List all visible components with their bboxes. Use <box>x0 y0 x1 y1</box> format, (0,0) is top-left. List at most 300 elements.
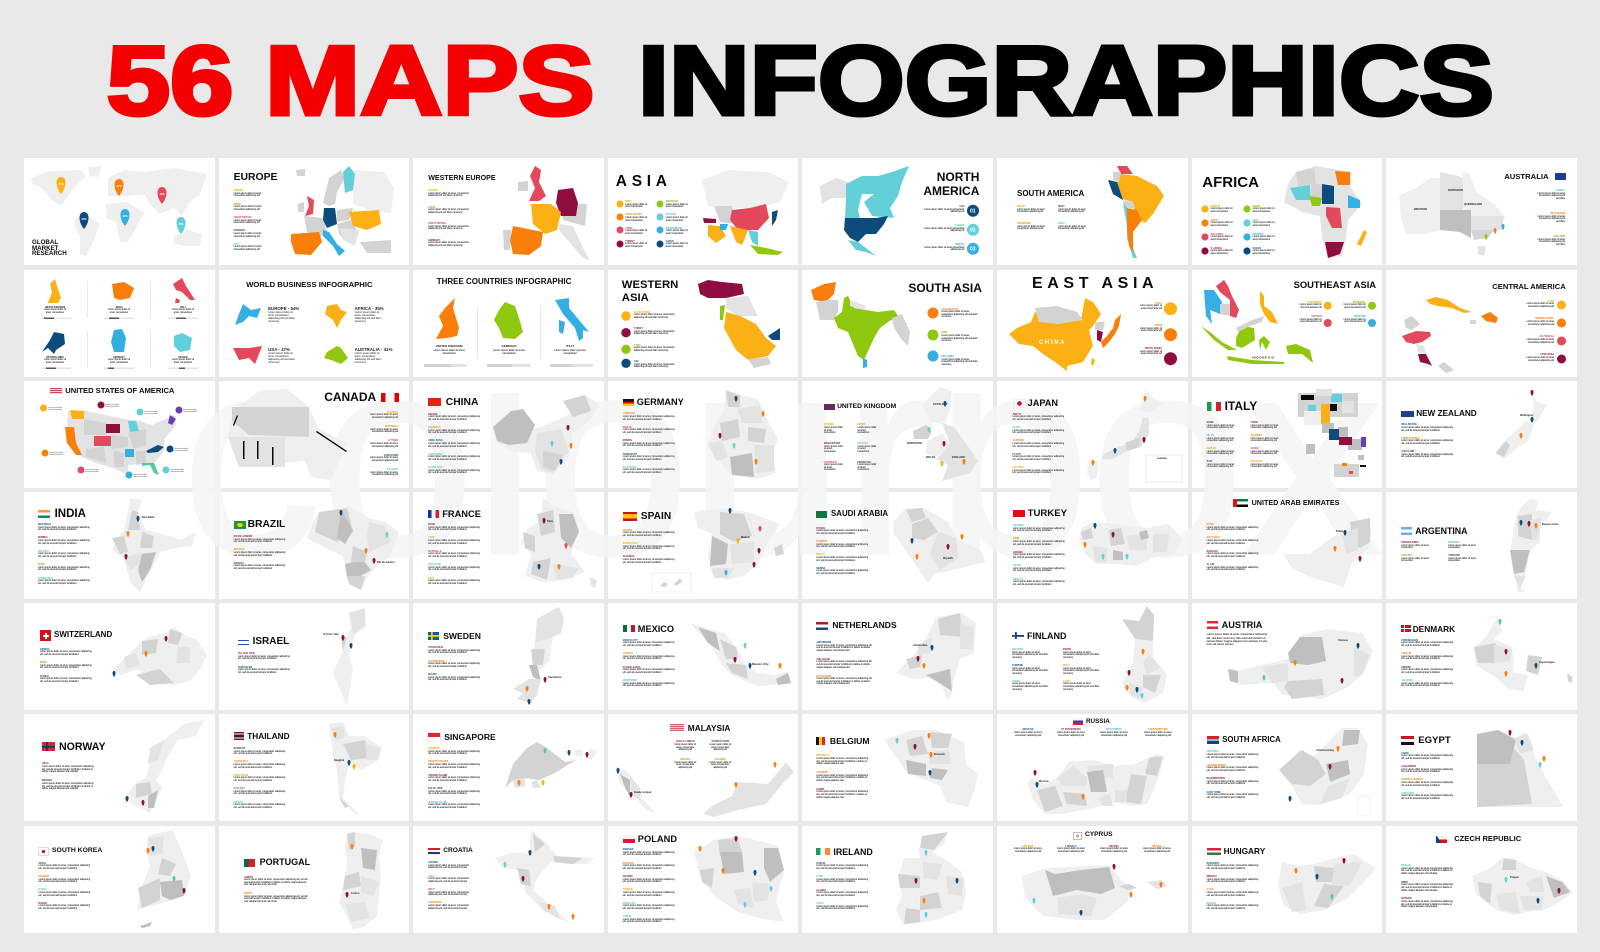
caption row 2: Germany: Lorem ipsum dolor sit amet, consectetur <box>108 359 130 364</box>
heading: SOUTH ASIA <box>908 280 982 294</box>
legend right: Lorem ipsum dolor sit amet consectetur <box>666 230 688 235</box>
map: world with pins: 21% <box>58 182 64 186</box>
panel: Central America <box>1386 270 1577 376</box>
text blocks: Lorem ipsum dolor sit amet, consectetur adipiscing elit, sed do eiusmod tempor incididunt <box>1012 430 1064 434</box>
text blocks: Lorem ipsum dolor sit amet, consectetur adipiscing elit, sed do eiusmod tempor incididunt ut labore et dolore magna aliquam erat <box>816 791 868 799</box>
text blocks: Lorem ipsum dolor sit amet, consectetur adipiscing elit, sed do eiusmod tempor incididunt <box>428 567 480 571</box>
text blocks: SLIGO <box>816 903 824 905</box>
text blocks: Lorem ipsum dolor sit amet, consectetur adipiscing elit, sed do eiusmod tempor incididunt <box>428 663 480 668</box>
text blocks: STOCKHOLM <box>428 647 443 649</box>
heading line 2: AMERICA <box>923 184 979 198</box>
text left: TAMPERE <box>1012 665 1023 667</box>
text blocks: GREAT BRITAIN <box>234 217 251 219</box>
text blocks: KOLKATA <box>38 551 49 553</box>
legend left: Lorem ipsum dolor sit amet consectetur <box>1211 236 1233 241</box>
text blocks: MUNICH <box>623 440 632 442</box>
text blocks: PHUKET <box>234 802 243 804</box>
text blocks: Lorem ipsum dolor sit amet, consectetur adipiscing elit, sed do eiusmod tempor incididunt <box>623 642 675 647</box>
icon: flag <box>816 622 828 630</box>
text left: Lorem ipsum dolor sit amet consectetur <box>1401 545 1429 549</box>
heading: SPAIN <box>641 511 671 522</box>
icon: flag <box>670 724 684 731</box>
text blocks: MELBOURNE <box>1550 213 1565 215</box>
heading: AUSTRALIA <box>1504 172 1549 181</box>
icon: flag <box>623 399 634 406</box>
text blocks: MEXICO <box>955 244 964 246</box>
text blocks: WROCLAW <box>623 903 635 905</box>
map: UK: SCOTLAND <box>933 402 948 406</box>
panel: South Korea <box>24 826 214 933</box>
map: Mexico: Mexico City <box>752 662 769 666</box>
icon: flag <box>381 393 399 402</box>
map: Portugal: Lisbon <box>351 891 360 895</box>
heading: IRELAND <box>833 847 873 857</box>
text right: PERU <box>1058 206 1064 208</box>
heading: NETHERLANDS <box>832 620 897 630</box>
text blocks: LISBON <box>244 877 253 879</box>
text blocks: Lorem ipsum dolor sit amet, consectetur adipiscing elit, sed do eiusmod tempor incididunt <box>816 570 868 575</box>
text right: Lorem ipsum dolor sit amet consectetur <box>1448 545 1476 549</box>
text blocks: Lorem ipsum dolor sit amet, consectetur adipiscing elit, sed do eiusmod tempor incididunt <box>428 777 480 782</box>
panel: North America <box>802 158 993 265</box>
text blocks: Lorem ipsum dolor sit amet, consectetur adipiscing elit, sed do eiusmod tempor incididunt <box>1207 879 1258 883</box>
text blocks: Lorem ipsum dolor sit amet, consectetur adipiscing elit sed diam nonummy <box>428 226 469 230</box>
text left: Lorem ipsum dolor sit amet consectetur adipiscing elit <box>1207 438 1234 442</box>
map: world with pins <box>31 166 207 256</box>
text blocks: Lorem ipsum dolor sit amet, consectetur adipiscing elit, sed do eiusmod tempor incididunt ut labore et dolore magna aliquam erat volutpat wisi enim ad minim <box>244 879 308 886</box>
icon: flag <box>623 625 635 632</box>
legend left: EGYPT <box>1211 220 1218 222</box>
text right: EDINBURGH <box>857 462 871 464</box>
icon: flag <box>816 737 825 745</box>
text blocks: CAIRO <box>1401 753 1409 755</box>
legend left: INDIA <box>625 201 632 203</box>
text blocks: Lorem ipsum dolor sit amet, consectetur adipiscing elit, sed do eiusmod tempor incididunt ut labore et dolore magna aliquam erat volutpat wisi <box>816 661 872 669</box>
text blocks: SAPPORO <box>1012 440 1024 442</box>
text blocks: Lorem ipsum dolor sit amet, consectetur adipiscing elit <box>370 429 398 433</box>
text right <box>1058 205 1086 230</box>
text blocks: Lorem ipsum dolor sit amet, consectetur adipiscing elit, sed do eiusmod tempor incididunt <box>38 527 90 531</box>
text blocks: Lorem ipsum dolor sit amet, consectetur adipiscing elit, sed do eiusmod tempor incididunt <box>234 764 285 769</box>
text col 1: Lorem ipsum dolor sit amet, consectetur adipiscing elit <box>674 762 696 769</box>
text right: BOLOGNA <box>1251 461 1262 463</box>
text blocks: Lorem ipsum dolor sit amet, consectetur adipiscing elit, sed do eiusmod tempor <box>428 892 469 896</box>
panel: Portugal <box>219 826 409 933</box>
text left: Lorem ipsum dolor sit amet consectetur <box>1401 558 1429 562</box>
map: Mexico <box>608 603 798 710</box>
heading line 2: ASIA <box>622 292 649 304</box>
text left: LIVERPOOL <box>824 462 837 464</box>
icon: flag <box>428 632 439 640</box>
caption row 2: Germany <box>108 356 130 364</box>
legend left: Lorem ipsum dolor sit amet consectetur <box>625 204 647 208</box>
map: Thailand: Bangkok <box>334 759 344 762</box>
text col 2: GEORGE TOWN <box>711 741 729 743</box>
legend left <box>1210 205 1233 255</box>
text blocks: THE HAGUE <box>816 659 830 661</box>
paragraph: Lorem ipsum dolor sit amet, consectetur adipiscing elit, sed diam nonummy nibh euismod tincidunt ut laoreet dolore magna aliquam erat volutpat. Ut wisi enim ad minim veniam <box>1207 633 1267 646</box>
map and numbered markers: 03 <box>970 247 976 253</box>
text blocks: BERLIN <box>623 427 631 429</box>
text col 2: KUCHING <box>715 759 726 761</box>
map and bubbles: Lorem ipsum dolor <box>48 406 62 409</box>
panel: South Africa <box>1192 714 1382 821</box>
panel: Italy <box>1192 381 1382 488</box>
text blocks: MEXICO CITY <box>623 640 638 642</box>
block: Europe <box>268 306 300 323</box>
text blocks <box>428 748 482 809</box>
text: Paphos <box>1141 846 1173 853</box>
map and bubbles: Lorem ipsum dolor <box>144 412 158 415</box>
text blocks: Lorem ipsum dolor sit amet, consectetur adipiscing elit, sed do eiusmod tempor incididunt <box>38 892 90 897</box>
text blocks: ANKARA <box>1013 552 1023 554</box>
text blocks: CHINA <box>1155 302 1162 304</box>
caption row 2: France <box>172 356 194 364</box>
text: St Petersburg: Lorem ipsum dolor sit amet, consectetur adipiscing elit <box>1057 732 1085 737</box>
icon: flag <box>234 521 246 529</box>
text blocks: Lorem ipsum dolor sit amet, consectetur adipiscing elit sed diam nonummy <box>634 364 675 368</box>
text left: MILAN <box>1207 435 1214 437</box>
map: UK <box>802 381 993 488</box>
map: UK: NORTHERN <box>907 441 922 445</box>
legend right: Lorem ipsum dolor sit amet consectetur <box>1253 222 1275 227</box>
heading: SINGAPORE <box>444 732 496 742</box>
text blocks: Lorem ipsum dolor sit amet, consectetur adipiscing elit, sed do eiusmod tempor incididunt ut labore et dolore magna aliquam erat volutpat <box>1401 884 1453 892</box>
text blocks: Lorem ipsum dolor sit amet consectetur adipiscing elit <box>1526 357 1554 362</box>
text blocks: PORTO <box>244 893 252 895</box>
text blocks <box>38 524 92 585</box>
map and bubbles: Lorem ipsum dolor <box>144 410 158 413</box>
icon: flag <box>428 733 440 741</box>
text left: Lorem ipsum dolor sit amet consectetur elit <box>1300 304 1322 309</box>
text right: MENDOZA <box>1448 542 1460 544</box>
text blocks: AUCKLAND <box>1401 451 1414 453</box>
icon: flag <box>1401 625 1411 632</box>
heading: SWEDEN <box>443 631 481 641</box>
text blocks: Lorem ipsum dolor sit amet, consectetur adipiscing elit, sed do eiusmod tempor incididunt <box>1013 528 1065 532</box>
text blocks: SYDNEY <box>1556 190 1565 192</box>
text blocks: Lorem ipsum dolor sit amet consectetur adipiscing elit sed diam <box>1537 239 1565 246</box>
text col 1: KUALA LUMPUR <box>676 741 694 743</box>
icon: flag <box>428 848 440 854</box>
map: Belgium <box>802 714 993 821</box>
map: Denmark: Copenhagen <box>1539 660 1555 664</box>
map and markers <box>811 282 938 368</box>
text blocks: BRASILIA <box>234 549 244 551</box>
icon: flag <box>623 835 635 843</box>
text blocks: MARSEILLE <box>428 551 441 553</box>
text blocks: KYOTO <box>1012 454 1021 456</box>
text blocks: DUBROVNIK <box>428 902 442 904</box>
text blocks: Lorem ipsum dolor sit amet, consectetur adipiscing elit, sed do eiusmod tempor incididunt <box>1401 656 1453 660</box>
text left: BRAZIL <box>1017 206 1025 208</box>
panel: New Zealand <box>1386 381 1577 488</box>
map and bubbles: Lorem ipsum dolor <box>183 408 197 411</box>
map: Canada <box>219 381 409 488</box>
legend right: Lorem ipsum dolor sit amet consectetur <box>1253 250 1275 255</box>
map: world with pins: 34% <box>122 214 128 218</box>
legend right: Lorem ipsum dolor sit amet consectetur <box>666 243 688 248</box>
text blocks: Lorem ipsum dolor sit amet, consectetur adipiscing elit, sed do eiusmod tempor incididunt <box>428 416 480 421</box>
heading: SOUTHEAST ASIA <box>1294 279 1376 290</box>
title: INFOGRAPHICS <box>638 26 1494 136</box>
map and bubbles: Lorem ipsum dolor <box>170 468 184 471</box>
map: Western Europe <box>503 166 590 260</box>
panel: Finland <box>997 603 1188 710</box>
text blocks: Lorem ipsum dolor sit amet, consectetur adipiscing elit, sed do eiusmod tempor incididunt <box>1013 541 1065 546</box>
map: South America <box>1108 166 1164 258</box>
text blocks: TORONTO <box>387 412 398 414</box>
heading: SOUTH KOREA <box>52 847 102 854</box>
text left: ARGENTINA <box>1017 223 1031 225</box>
heading: EUROPE <box>234 172 277 183</box>
legend right: Lorem ipsum dolor sit amet consectetur <box>1253 236 1275 241</box>
map: Malaysia: Kuala Lumpur <box>634 790 651 794</box>
map: Australia <box>1399 172 1506 256</box>
text blocks: Lorem ipsum dolor sit amet, consectetur adipiscing elit, sed do eiusmod tempor incididunt <box>816 544 868 548</box>
map: UAE: Dubai <box>1336 529 1343 533</box>
map: Australia: WESTERN <box>1414 207 1427 211</box>
map and legend markers <box>616 170 789 255</box>
heading: SAUDI ARABIA <box>831 509 888 518</box>
text blocks: Lorem ipsum dolor sit amet, consectetur adipiscing elit, sed do eiusmod tempor incididunt <box>38 879 90 883</box>
panel: USA <box>24 381 214 488</box>
map: world with pins: 25% <box>178 222 184 226</box>
text blocks <box>816 642 874 686</box>
text left: Lorem ipsum dolor sit amet consectetur adipiscing elit <box>1207 425 1234 429</box>
map: Austria: Vienna <box>1338 638 1348 642</box>
text blocks: MISKOLC <box>1207 876 1217 878</box>
text blocks: GOTHENBURG <box>428 661 445 663</box>
text right: Lorem ipsum dolor sit amet consectetur adipiscing elit <box>1251 451 1278 455</box>
text blocks: Lorem ipsum dolor sit amet, consectetur adipiscing elit, sed do eiusmod tempor incididunt <box>428 443 480 448</box>
icon: flag <box>1233 499 1248 507</box>
map and markers <box>1009 298 1177 371</box>
text blocks: UDON THANI <box>234 775 248 777</box>
text left <box>1207 422 1241 469</box>
map: Norway <box>24 714 214 821</box>
text blocks: ABU DHABI <box>1207 537 1219 539</box>
text blocks <box>816 863 870 911</box>
text: Nicosia <box>1098 846 1130 853</box>
text left <box>1401 542 1429 563</box>
panel: Israel <box>219 603 409 710</box>
text blocks: SI SA KET <box>234 788 245 790</box>
text left: BARI <box>1207 461 1212 463</box>
panel: France <box>413 492 604 599</box>
text blocks: HURGHADA <box>1401 793 1415 795</box>
text right: Lorem ipsum dolor sit amet, consectetur adipiscing elit sed diam nonummy <box>1063 683 1099 690</box>
text left: PHILIPPINES <box>1307 302 1322 304</box>
text right: Lorem ipsum dolor sit amet, consectetur adipiscing elit sed diam nonummy <box>1063 668 1099 675</box>
text blocks: Lorem ipsum dolor sit amet, consectetur adipiscing elit, sed do eiusmod tempor incididunt ut labore et dolore magna aliquam erat volutpat wisi enim ad minim <box>244 896 308 903</box>
text blocks: Lorem ipsum dolor sit amet, consectetur adipiscing elit, sed do eiusmod tempor incididunt <box>816 530 868 535</box>
text blocks: WARSAW <box>623 849 633 851</box>
map: New Zealand <box>1386 381 1577 488</box>
text left: HELSINKI <box>1012 649 1023 651</box>
heading: SWITZERLAND <box>54 630 112 639</box>
heading: HUNGARY <box>1224 846 1265 856</box>
text col 2: Lorem ipsum dolor sit amet, consectetur adipiscing elit <box>709 762 731 769</box>
caption row 1: Italy <box>172 306 194 314</box>
map and bubbles: Lorem ipsum dolor <box>133 473 147 476</box>
heading: AFRICA <box>1202 174 1259 191</box>
legend left: Lorem ipsum dolor sit amet consectetur <box>625 230 647 235</box>
inset and map: Madrid <box>741 535 750 539</box>
map silhouettes and bars <box>424 298 593 367</box>
text blocks: GHENT <box>816 789 824 791</box>
text left: ROSARIO <box>1401 555 1412 557</box>
text blocks: Lorem ipsum dolor sit amet consectetur adipiscing elit <box>924 247 964 251</box>
text blocks: Lorem ipsum dolor sit amet, consectetur adipiscing elit, sed do eiusmod tempor incididunt <box>1207 781 1258 785</box>
text blocks: Lorem ipsum dolor sit amet, consectetur adipiscing elit, sed do eiusmod tempor incididunt <box>623 865 675 870</box>
text blocks: Lorem ipsum dolor sit amet, consectetur adipiscing elit, sed do eiusmod tempor incididunt <box>1207 865 1258 870</box>
text blocks: Lorem ipsum dolor sit amet, consectetur adipiscing elit, sed do eiusmod tempor incididunt <box>1207 905 1258 910</box>
inset and map <box>608 492 798 599</box>
text blocks: ISTANBUL <box>1013 525 1024 527</box>
text blocks: FRANCE <box>428 190 438 192</box>
text right: THAILAND <box>1354 316 1366 318</box>
text blocks: Lorem ipsum dolor sit amet, consectetur adipiscing elit, sed do eiusmod tempor incididunt <box>1207 553 1258 558</box>
text blocks: GUATEMALA <box>1540 336 1554 338</box>
text blocks: MUMBAI <box>38 537 47 539</box>
text blocks <box>1401 640 1454 688</box>
heading: ITALY <box>1225 399 1257 413</box>
panel: Japan <box>997 381 1188 488</box>
text blocks: GUANGZHOU <box>428 467 443 469</box>
caption: Germany: GERMANY <box>502 344 517 348</box>
map: UK: ENGLAND <box>952 455 965 459</box>
text blocks: Lorem ipsum dolor sit amet, consectetur adipiscing elit sed diam nonummy <box>941 335 978 342</box>
text blocks: Lorem ipsum dolor sit amet consectetur elit <box>1140 351 1162 355</box>
text blocks: Lorem ipsum dolor sit amet, consectetur adipiscing elit, sed do eiusmod tempor incididunt <box>234 539 285 543</box>
text blocks: Lorem ipsum dolor sit amet, consectetur adipiscing elit, sed do eiusmod tempor incididunt <box>38 580 90 585</box>
text blocks: Lorem ipsum dolor sit amet, consectetur adipiscing elit, sed do eiusmod tempor incididunt <box>623 879 675 883</box>
text left: Lorem ipsum dolor sit amet, consectetur <box>824 446 843 453</box>
text blocks: DUBLIN <box>816 863 825 865</box>
text blocks: Lorem ipsum dolor sit amet, consectetur adipiscing elit, sed do eiusmod tempor incididunt ut labore et dolore magna aliquam erat volutpat <box>1401 868 1453 875</box>
text left: BUENOS AIRES <box>1401 542 1419 544</box>
map: Finland <box>997 603 1188 710</box>
text: Moscow: Lorem ipsum dolor sit amet, consectetur adipiscing elit <box>1014 732 1042 737</box>
map: mosaic Italy <box>1192 381 1382 488</box>
block: USA: Lorem ipsum dolor sit amet, consectetur adipiscing elit sed diam nonummy <box>268 352 295 364</box>
map: Argentina: Buenos Aires <box>1542 522 1559 526</box>
text blocks: Lorem ipsum dolor sit amet, consectetur adipiscing elit, sed do eiusmod tempor incididunt <box>623 429 675 434</box>
text blocks: ALEXANDRIA <box>1401 766 1416 768</box>
panel: Western Europe <box>413 158 604 265</box>
legend right: KAZAKHSTAN <box>666 228 682 230</box>
text blocks <box>1401 424 1453 459</box>
text left: Lorem ipsum dolor sit amet, consectetur adipiscing elit sed diam nonummy <box>1012 683 1048 690</box>
text blocks <box>428 647 482 682</box>
text right: Lorem ipsum dolor sit amet consectetur elit <box>1344 304 1366 309</box>
map: Cyprus <box>997 826 1188 933</box>
panel: Mexico <box>608 603 798 710</box>
text blocks: BLOEMFONTEIN <box>1207 778 1225 780</box>
map: Israel <box>219 603 409 710</box>
text blocks: GYOR <box>1207 889 1213 891</box>
text blocks: BUDAPEST <box>1207 863 1219 865</box>
text blocks: Lorem ipsum dolor sit amet, consectetur adipiscing elit, sed do eiusmod tempor incididunt <box>38 553 90 558</box>
text blocks: Lorem ipsum dolor sit amet, consectetur adipiscing elit, sed do eiusmod tempor incididunt <box>38 905 90 910</box>
block: Africa: AFRICA - 35% <box>355 306 384 311</box>
text blocks: Lorem ipsum dolor sit amet, consectetur adipiscing elit, sed do eiusmod tempor incididunt <box>816 892 868 897</box>
map silhouettes <box>41 278 198 369</box>
text blocks: INCHEON <box>38 876 49 878</box>
map: Sweden <box>413 603 604 710</box>
map: Argentina <box>1386 492 1577 599</box>
text blocks: GUADALAJARA <box>623 667 641 669</box>
map: Israel: Tel Aviv Yafo <box>323 632 339 636</box>
text blocks: Lorem ipsum dolor sit amet, consectetur adipiscing elit, sed do eiusmod tempor incididunt <box>428 553 480 558</box>
heading: WESTERN EUROPE <box>428 174 496 182</box>
text blocks: TEL AVIV YAFO <box>238 653 255 655</box>
text blocks <box>623 849 677 924</box>
panel: India <box>24 492 214 599</box>
text right: Lorem ipsum dolor sit amet, consectetur <box>857 464 876 471</box>
text blocks: Lorem ipsum dolor sit amet, consectetur adipiscing elit, sed do eiusmod tempor incididunt <box>1012 416 1064 421</box>
text blocks: Lorem ipsum dolor sit amet, consectetur adipiscing elit, sed do eiusmod tempor incididunt <box>40 651 92 656</box>
text blocks: DAEGU <box>38 889 47 891</box>
text: Novosibirsk: Lorem ipsum dolor sit amet, consectetur adipiscing elit <box>1100 732 1128 737</box>
text blocks: Lorem ipsum dolor sit amet, consectetur adipiscing elit sed diam nonummy <box>941 359 978 366</box>
legend left: SAUDI ARABIA <box>625 214 642 216</box>
text blocks: Lorem ipsum dolor sit amet, consectetur adipiscing elit, sed do eiusmod tempor incididunt ut labore et dolore magna aliquam erat volutpat <box>42 783 94 790</box>
text blocks <box>623 640 677 688</box>
text left: Lorem ipsum dolor sit amet consectetur adipiscing elit <box>1017 226 1045 230</box>
text blocks: PULAU UBIN <box>428 788 442 790</box>
caption: Germany: Lorem ipsum dolor sit amet, consectetur <box>493 349 525 355</box>
legend right: Lorem ipsum dolor sit amet consectetur <box>666 217 688 222</box>
text blocks: MEDINA <box>816 568 825 570</box>
text blocks: Lorem ipsum dolor sit amet, consectetur adipiscing elit, sed do eiusmod tempor incididunt <box>234 552 285 557</box>
heading: CENTRAL AMERICA <box>1492 282 1566 291</box>
panel: UAE <box>1192 492 1382 599</box>
panel: Hungary <box>1192 826 1382 933</box>
panel: Germany <box>608 381 798 488</box>
text blocks: GREAT BRITAIN <box>428 223 446 225</box>
legend left: CHINA <box>625 228 633 230</box>
text right: OULU <box>1063 665 1070 667</box>
text col 1 <box>673 741 698 770</box>
text blocks: Lorem ipsum dolor sit amet, consectetur adipiscing elit, sed do eiusmod tempor incididunt <box>623 532 675 537</box>
panel: Thailand <box>219 714 409 821</box>
text blocks: HAMBURG <box>623 413 635 415</box>
text blocks: Lorem ipsum dolor sit amet, consectetur adipiscing elit, sed do eiusmod tempor incididunt <box>623 905 675 910</box>
caption row 1: Italy: Lorem ipsum dolor sit amet, consectetur <box>172 309 194 314</box>
map and markers <box>1192 270 1382 376</box>
icon: flag <box>1436 836 1447 843</box>
caption: Italy: Lorem ipsum dolor sit amet, consectetur <box>554 349 586 355</box>
heading: SOUTH AMERICA <box>1017 189 1084 198</box>
text: Paphos: PAPHOS <box>1152 846 1162 848</box>
panel: Malaysia <box>608 714 798 821</box>
text blocks: FUKUOKA <box>1012 467 1024 469</box>
icon: flag <box>1207 736 1219 744</box>
text blocks: Lorem ipsum dolor sit amet, consectetur adipiscing elit, sed do eiusmod tempor incididunt <box>1401 427 1453 432</box>
map and markers: INDONESIA <box>1252 355 1275 359</box>
icon: flag <box>816 511 827 518</box>
text blocks: CUBA <box>1548 300 1554 302</box>
text blocks: SHARM EL SHEIKH <box>1401 779 1422 781</box>
panel: Ireland <box>802 826 993 933</box>
legend right: ETHIOPIA <box>1253 234 1263 236</box>
text blocks: Lorem ipsum dolor sit amet, consectetur adipiscing elit, sed do eiusmod tempor incididunt <box>1207 754 1258 759</box>
caption row 2: Netherlands <box>44 356 66 364</box>
icon: flag <box>1401 736 1414 745</box>
block: USA: USA - 47% <box>268 346 290 352</box>
